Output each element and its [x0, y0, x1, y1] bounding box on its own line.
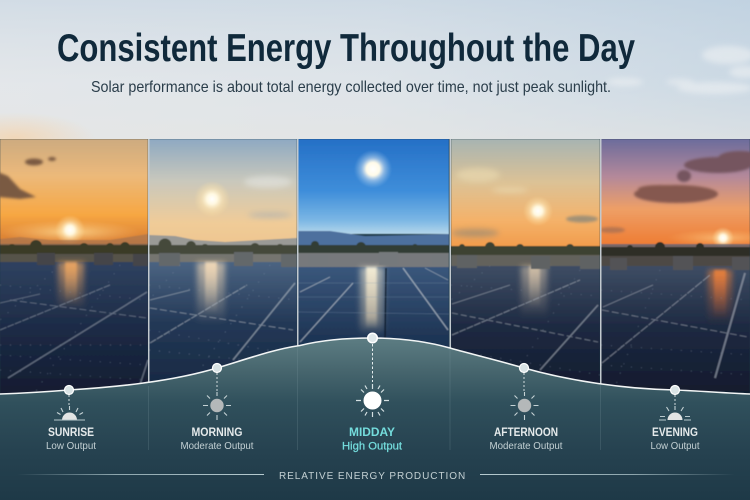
- icon: midday sun: [356, 384, 389, 417]
- icon: afternoon sun: [510, 392, 538, 420]
- icon: sunrise half sun: [54, 406, 85, 420]
- afternoon output: Moderate Output: [490, 440, 563, 452]
- panel: sunrise photo: [0, 139, 148, 400]
- evening label: EVENING: [652, 425, 698, 439]
- panel: evening photo: [599, 139, 750, 400]
- evening output: Low Output: [650, 440, 700, 452]
- midday marker and dashed stem: [368, 333, 377, 382]
- afternoon label: AFTERNOON: [494, 425, 558, 439]
- panel: afternoon photo: [451, 139, 600, 400]
- column: midday: [342, 333, 402, 452]
- evening marker and dashed stem: [670, 386, 680, 405]
- subtitle: Solar performance is about total energy collected over time, not just peak sunlight.: [91, 79, 611, 96]
- column: morning: [180, 364, 254, 452]
- header sky background: [0, 0, 750, 139]
- sunrise label: SUNRISE: [48, 425, 94, 439]
- energy production area under the curve: [0, 338, 750, 500]
- afternoon marker and dashed stem: [520, 364, 528, 393]
- panel: morning photo: [149, 139, 297, 400]
- column: evening: [650, 386, 700, 452]
- column: sunrise: [46, 386, 96, 452]
- icon: evening half sun: [659, 406, 691, 420]
- dividers between photos: [148, 139, 602, 386]
- morning label: MORNING: [192, 425, 242, 439]
- sunrise marker and dashed stem: [64, 386, 74, 405]
- sunrise output: Low Output: [46, 440, 96, 452]
- axis caption: relative energy production: RELATIVE ENERGY PRODUCTION: [279, 471, 466, 482]
- morning marker and dashed stem: [212, 364, 222, 393]
- icon: morning sun: [203, 392, 231, 420]
- morning output: Moderate Output: [180, 440, 254, 452]
- energy curve line: [0, 338, 750, 394]
- midday output: High Output: [342, 440, 402, 452]
- faint column dividers in the base: [148, 347, 600, 450]
- panel: midday photo: [298, 139, 449, 346]
- midday label: MIDDAY: [349, 425, 395, 439]
- column: afternoon: [490, 364, 563, 452]
